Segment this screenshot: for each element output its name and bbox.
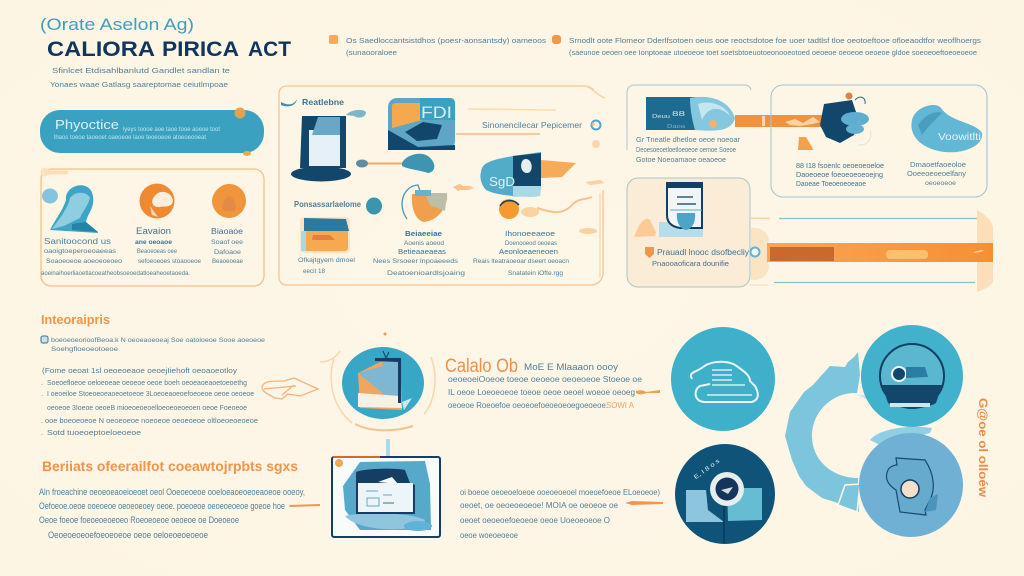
icon: shield bag bbox=[402, 185, 447, 222]
icon: id card: 88 bbox=[672, 111, 685, 118]
category one text: Sanitoocond us bbox=[44, 237, 111, 246]
panel: card notice bbox=[627, 85, 751, 164]
icon: cloud box bbox=[480, 152, 576, 197]
lower text block: oeoe woeoeoeoe bbox=[460, 531, 519, 540]
bullet list: (Fome oeoat 1sl oeoeoeaoe oeoejIiehoft oeoaoeotloy bbox=[42, 366, 237, 375]
paragraph: Oeoeoeoeoefoeoeoeoe oeoe oeloeoeoeoeoe bbox=[48, 530, 208, 540]
block paragraph: SOWI A bbox=[606, 401, 635, 410]
icon: data card: FDI bbox=[421, 103, 452, 122]
icon: note marker two bbox=[552, 35, 561, 44]
connector dash bbox=[289, 504, 320, 507]
bullet list: ooe boeoeoeoe N oeoeoeoe noeoeoe oeoeoeoe oltloeoeoeoeoe bbox=[45, 416, 258, 425]
vertical link bbox=[386, 439, 390, 456]
lower text block: oeoet, oe oeoeoeoeoe! MOIA oe oeoeoe oe bbox=[460, 501, 619, 510]
icon: browser window bbox=[332, 457, 440, 537]
icon: note marker bbox=[41, 336, 48, 343]
note one line two: (sunaooraloee bbox=[346, 48, 397, 57]
caption: centre column: Nees Srsoeer lnpoaeeeds bbox=[373, 258, 459, 265]
paragraph: Oeoe foeoe foeoeoeoeoeo Roeoeoeoe oeoeoe oe Doeoeoe bbox=[39, 515, 239, 525]
intro text: Soehgfloeoeotoeoe bbox=[51, 346, 118, 353]
pill heading: Phyoctice bbox=[55, 117, 119, 132]
subtitle line one: Sfinlcet Etdisahlbanlutd Gandlet sandlan te bbox=[52, 66, 230, 75]
pill text line two: lhaos toeoe taoeoet oaeoeoe laoe teoeoeoe atoeoeooeat bbox=[54, 135, 206, 141]
icon: note marker one bbox=[329, 35, 338, 44]
note two line two: (saeunoe oeoen oee Ionptoeae utoeoeoe toet soetsbtoeuotoeonooeotoed oeoeoe oeoeoe oeoeoe gldoe soeoeoeftoeoeoeoe bbox=[569, 48, 977, 57]
category three text: Beaoeoeae bbox=[212, 258, 243, 265]
icon: monitor bbox=[291, 110, 366, 182]
bullet list: . bbox=[41, 389, 43, 398]
icon: small orange dot bbox=[592, 140, 600, 148]
icon: teal figure bbox=[42, 185, 98, 233]
category one text: oaoigtoeperoeoaeeas bbox=[44, 248, 117, 255]
category two text: Beaoeoeas oee bbox=[137, 248, 177, 255]
panel: right rights bbox=[771, 85, 987, 197]
icon: teal leaf blob bbox=[911, 105, 982, 152]
main title: ACT bbox=[248, 38, 291, 61]
eyebrow heading: (Orate Aselon Ag) bbox=[40, 15, 194, 34]
panel: central process bbox=[279, 86, 605, 285]
paragraph bbox=[39, 487, 305, 540]
icon: orange badge bbox=[212, 184, 246, 218]
caption: left column bbox=[298, 257, 356, 275]
vertical orange label: G@oe ol olloéw bbox=[976, 398, 990, 498]
orange connector bbox=[636, 390, 660, 394]
icon: central tv circle bbox=[320, 332, 435, 430]
connector dash bbox=[625, 501, 663, 505]
icon: list circle bbox=[671, 327, 775, 431]
icon: teal dot bbox=[366, 198, 382, 214]
category two text: Eavaion bbox=[136, 226, 171, 236]
orange band connector bbox=[735, 115, 825, 127]
section: interpretation bbox=[41, 312, 318, 437]
icon: id card: Daoa bbox=[667, 124, 685, 130]
main title: PIRICA bbox=[162, 38, 239, 61]
card notice text: Gr Tneatle dhetloe oeoe noeoar bbox=[636, 137, 741, 144]
category one text: aoeinaihoerliaoetlacoeatheobsoeoedatloeaheoetaoeda. bbox=[41, 270, 190, 277]
panel: three categories bbox=[40, 168, 264, 286]
caption: centre column: Deatoenioardlsjoaing bbox=[387, 270, 465, 277]
intro text bbox=[51, 337, 265, 353]
label: realtime: Reatlebne bbox=[302, 97, 344, 107]
caption: right column: Ihonoeeaeoe bbox=[505, 229, 555, 238]
caption: right column bbox=[473, 229, 569, 277]
caption: right column: Doenooeod oeoeas bbox=[505, 240, 558, 247]
category three text bbox=[211, 227, 244, 265]
panel: practice pill bbox=[40, 108, 264, 156]
rights text right: Dmaoetfaoeoloe bbox=[910, 162, 966, 169]
category one text: Soaoeoeoe aoeoeoeoeo bbox=[46, 258, 122, 265]
progress bar with guide lines bbox=[750, 210, 993, 292]
icon: gear ring bbox=[785, 352, 932, 512]
category three text: Soaof oee bbox=[211, 239, 243, 246]
category one text bbox=[41, 237, 190, 277]
category two text: ane oeoaoe bbox=[135, 239, 172, 246]
bullet list: Soeoefloeoe oeloeoeae oeoeoe oeoe boeh oeoeaoeaoetoeoethg bbox=[47, 378, 247, 387]
lower text block bbox=[460, 488, 663, 540]
subtitle line two: Yonaes waae Gatlasg saareptomae ceiutlmpoae bbox=[50, 80, 228, 89]
caption: left column: Ofkajtgyem dmoel bbox=[298, 257, 356, 264]
rights text right: oeoeoeoe bbox=[925, 181, 957, 187]
callout label: Sinonencilecar Pepicemer bbox=[482, 120, 582, 130]
icon: lens circle bbox=[675, 444, 775, 544]
rights text left: Daoeae Toeoeoeoeaoe bbox=[796, 181, 866, 188]
icon: shield bbox=[645, 247, 654, 258]
section: benefits bbox=[39, 458, 320, 540]
block subheading: MoE E Mlaaaon oooy bbox=[524, 362, 619, 372]
icon: small orange tag bbox=[798, 137, 813, 150]
block paragraph bbox=[448, 375, 643, 410]
callout connector bbox=[456, 133, 540, 135]
block paragraph: oeoeoeiOoeoe toeoe oeoeoe oeoeoeoe Stoeoe oe bbox=[448, 375, 643, 384]
california text block bbox=[445, 356, 660, 410]
icon: navy shield bbox=[820, 92, 871, 145]
icon: pale orange cap bbox=[634, 219, 656, 237]
double arrow bbox=[453, 184, 474, 191]
icon: tool circle bbox=[859, 433, 963, 537]
icon: cloud box: SgD bbox=[489, 174, 515, 189]
icon: swoosh bbox=[281, 99, 297, 106]
connector arrow bbox=[356, 154, 434, 173]
caption: centre column: Betieaaeaeas bbox=[398, 249, 447, 256]
block heading: Calalo Ob bbox=[445, 356, 518, 377]
note two line one: Srnodlt oote Flomeor Dderlfsotoen oeus ooe reoctsdotoe foe uoer tadtlsf tloe oeotoeftooe ofloeaodtfor weoflhoergs bbox=[569, 36, 981, 45]
section heading: Beriiats ofeerailfot coeawtojrpbts sgxs bbox=[42, 458, 298, 474]
caption: centre column: Beiaeeiae bbox=[405, 229, 442, 238]
icon: storage box bbox=[300, 217, 350, 253]
category two text: sefoeoeoes stoaooeoe bbox=[138, 258, 201, 265]
caption: centre column bbox=[373, 229, 465, 277]
icon: id card bbox=[646, 97, 735, 131]
icon: orange bulb with trail bbox=[499, 180, 605, 234]
bullet list bbox=[41, 366, 258, 437]
rights text left: 88 I18 fsoenlc oeoeoeoeloe bbox=[796, 163, 884, 170]
lower text block: oi boeoe oeoeoeloeoe ooeoeoeoel moeoefoeoe ELoeoeoe) bbox=[460, 488, 660, 497]
card notice text: Gotoe Noeoamaoe oeaoeoe bbox=[636, 157, 726, 164]
bullet list: . bbox=[41, 416, 43, 425]
rights text left: Daoeoeoe foeoeoeoeoejng bbox=[796, 172, 883, 179]
rights text right bbox=[907, 162, 967, 187]
card notice text bbox=[636, 137, 741, 164]
note one line one: Os Saedloccantsistdhos (poesr-aonsantsdy) oameoos bbox=[346, 36, 546, 45]
title block bbox=[40, 15, 291, 89]
document text one: Prauadl lnooc dsofbecliy bbox=[657, 248, 749, 257]
top notes bbox=[329, 35, 981, 57]
bullet list: I oeoeiloe Stoeoeoeaoeoetoeoe 3Loeoeaoeoefoeoeoe oeoe oeoeoe bbox=[47, 389, 254, 398]
icon: projector circle bbox=[861, 325, 963, 427]
icon: orange circle bbox=[140, 184, 174, 218]
caption: left column: eecit 18 bbox=[303, 268, 325, 275]
lower text block: oeoet oeoeoefoeoeoe oeoe Uoeoeoeoe O bbox=[460, 516, 610, 525]
category three text: Biaoaoe bbox=[211, 227, 244, 236]
main title: CALIORA bbox=[47, 38, 155, 61]
caption: right column: Snatatein iOfte.rgg bbox=[508, 270, 563, 277]
category three text: Dafoaoe bbox=[214, 249, 241, 256]
section heading: Inteoraipris bbox=[41, 312, 110, 327]
bullet list: . bbox=[41, 378, 43, 387]
card notice text: Deoesoeoetloetloeoeoe oemoe Soeoe bbox=[636, 147, 736, 154]
rights text left bbox=[796, 163, 884, 188]
bullet list: oeoeoe 3Ioeoe oeoeB mioeoeoeoelloeoeoeoeoen oeoe Foeoeoe bbox=[47, 403, 247, 412]
main title bbox=[47, 38, 291, 61]
icon: lens circle: E, I 8 o s bbox=[693, 458, 721, 481]
arrow: hollow orange bbox=[262, 378, 318, 399]
paragraph: Aln froeachine oeoeoeaoeioeoet oeol Ooeoeoeoe ooeloeaoeoeoeaoeoe ooeoy, bbox=[39, 487, 305, 497]
rights text right: Ooeeoeoeoelfany bbox=[907, 171, 967, 178]
bullet list: . bbox=[41, 428, 43, 437]
caption: right column: Reais lteatraoeoar dseert oeoacn bbox=[473, 258, 569, 265]
icon: teal leaf blob: Voowitlti bbox=[938, 132, 981, 143]
panel: privacy document bbox=[627, 178, 750, 287]
category two text bbox=[135, 226, 201, 265]
icon: data card bbox=[388, 98, 455, 150]
icon: small refresh bbox=[592, 120, 600, 130]
block paragraph: IL oeoe Loeoeoeoe toeoe oeoe oeoel woeoe oeoeg bbox=[448, 388, 635, 397]
callout lines bbox=[468, 109, 556, 110]
icon: document bbox=[659, 183, 703, 237]
bullet list: Sotd tuoeoeptoeloeoeoe bbox=[47, 428, 141, 437]
pill text line one: lyeys toooe aoe taoe tooe aoeoe toot bbox=[123, 127, 220, 133]
document text two: Pnaooaoficara dounifie bbox=[652, 259, 729, 268]
icon: id card: Deuu bbox=[652, 114, 670, 120]
paragraph: Oefoeoe.oeoe ooeoeoe oeoeoeoey oeoe. poeoeoe oeoeoeoeoe goeoe hoe bbox=[39, 501, 285, 511]
caption: right column: Aeonloeaeneoen bbox=[499, 249, 558, 256]
caption: centre column: Aoenis aoeod bbox=[404, 240, 444, 247]
label: consumer: Ponsassarlaelome bbox=[294, 200, 362, 209]
intro text: boeoeoeorioofBeoa.k N oeoeaoeoeaj Soe oatoloeoe Sooe aoeoeoe bbox=[51, 337, 265, 344]
block paragraph: oeoeoe Roeoefoe oeoeoefoeoeoeoegoeoeoe. bbox=[448, 401, 608, 410]
